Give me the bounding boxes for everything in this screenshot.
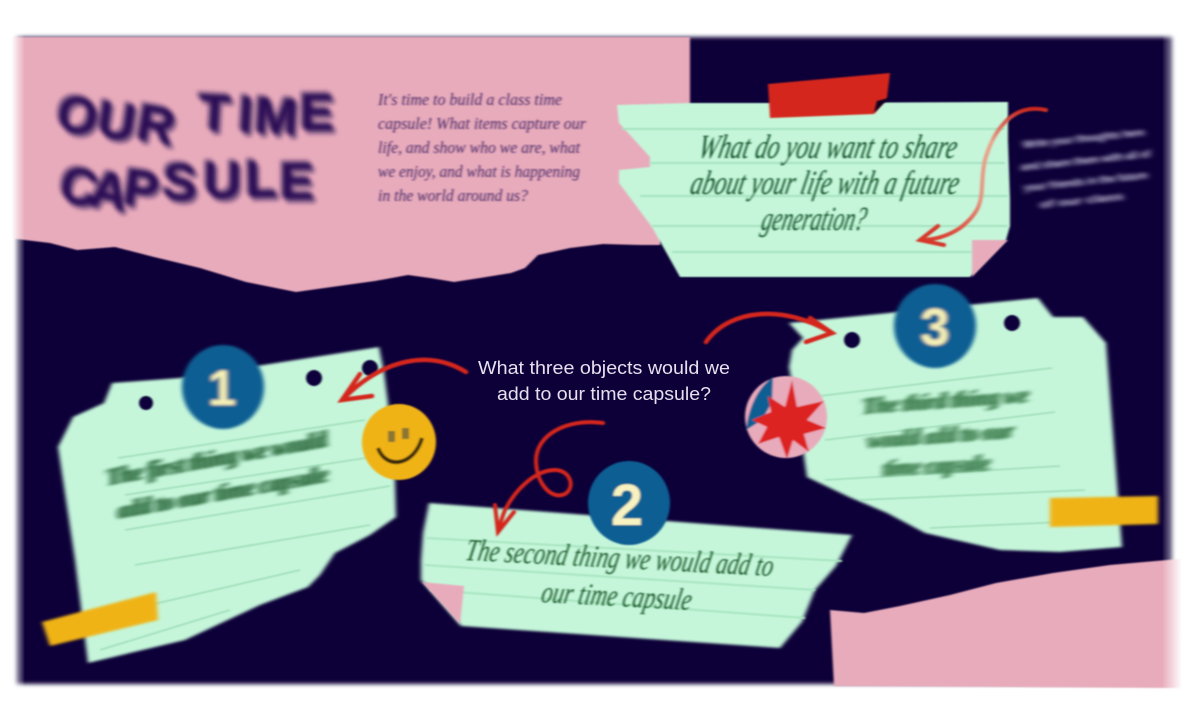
pink folded corner bbox=[422, 582, 464, 624]
text block: intro: we enjoy, and what is happening bbox=[378, 162, 580, 181]
note text: The first thing we would bbox=[105, 427, 329, 491]
text block: side caption: Write your thoughts here bbox=[1022, 127, 1145, 151]
title: CAPSULE bbox=[56, 150, 315, 223]
punch holes bbox=[844, 315, 1020, 348]
panel: top note bbox=[617, 73, 1046, 277]
text block: intro bbox=[377, 90, 586, 205]
number badge 1: 1 bbox=[208, 360, 236, 416]
question text: generation? bbox=[758, 200, 870, 238]
number badge 2 bbox=[588, 461, 670, 545]
arrow: to note 3 bbox=[706, 314, 832, 342]
black tape corner bbox=[874, 98, 889, 113]
note paper bbox=[421, 503, 852, 648]
note text: The third thing we bbox=[862, 382, 1029, 419]
yellow tape bbox=[42, 592, 158, 646]
text block: side caption: your friends in the future bbox=[1023, 170, 1148, 194]
note paper bbox=[617, 102, 1010, 277]
note paper bbox=[789, 298, 1122, 552]
number badge 1 bbox=[182, 345, 264, 429]
punch holes bbox=[139, 360, 378, 410]
panel: torn pink corner bbox=[830, 558, 1190, 688]
note text bbox=[105, 427, 330, 524]
title bbox=[55, 84, 335, 223]
icon: smiley sticker bbox=[362, 404, 436, 480]
left edge fade bbox=[0, 30, 25, 692]
note text bbox=[463, 532, 777, 617]
panel: note 3 bbox=[745, 284, 1158, 552]
panel: note 1 bbox=[42, 345, 436, 663]
yellow tape bbox=[1050, 496, 1158, 527]
question text: What do you want to share bbox=[695, 128, 961, 166]
arrow: down to note bbox=[920, 109, 1046, 245]
pink folded corner bbox=[972, 240, 1008, 277]
note text: The second thing we would add to bbox=[463, 532, 777, 583]
text block: intro: capsule! What items capture our bbox=[378, 114, 586, 133]
number badge 3 bbox=[894, 284, 976, 368]
icon: star sticker bbox=[745, 376, 827, 459]
text block: intro: It's time to build a class time bbox=[377, 90, 562, 109]
center question: add to our time capsule? bbox=[497, 384, 711, 404]
text block: intro: life, and show who we are, what bbox=[378, 138, 581, 157]
title: OUR TIME bbox=[55, 84, 335, 157]
note rules bbox=[820, 368, 1105, 528]
note rules bbox=[622, 129, 1008, 252]
note rules bbox=[424, 538, 842, 618]
red tape bbox=[768, 73, 890, 118]
number badge 3: 3 bbox=[921, 299, 949, 357]
center question bbox=[478, 358, 730, 404]
note text: time capsule bbox=[883, 450, 990, 481]
note rules bbox=[100, 420, 390, 650]
note text: add to our time capsule bbox=[116, 462, 330, 524]
text block: side caption: of our class bbox=[1039, 191, 1124, 211]
note text bbox=[862, 382, 1029, 481]
center question: What three objects would we bbox=[478, 358, 730, 378]
panel: note 2 bbox=[421, 461, 852, 648]
right margin bbox=[1182, 0, 1192, 720]
note paper bbox=[58, 347, 396, 663]
question text bbox=[687, 128, 963, 238]
number badge 2: 2 bbox=[611, 473, 643, 538]
text block: intro: in the world around us? bbox=[378, 186, 528, 205]
arrow: to note 1 bbox=[342, 360, 466, 400]
right edge fade bbox=[1162, 30, 1182, 692]
text block: side caption bbox=[1020, 127, 1151, 211]
note text: would add to our bbox=[867, 418, 1015, 453]
panel: torn pink header bbox=[8, 37, 690, 292]
text block: side caption: and share them with all of bbox=[1020, 148, 1151, 174]
note text: our time capsule bbox=[539, 574, 695, 617]
question text: about your life with a future bbox=[687, 164, 963, 202]
arrow: to note 2 bbox=[495, 422, 603, 532]
